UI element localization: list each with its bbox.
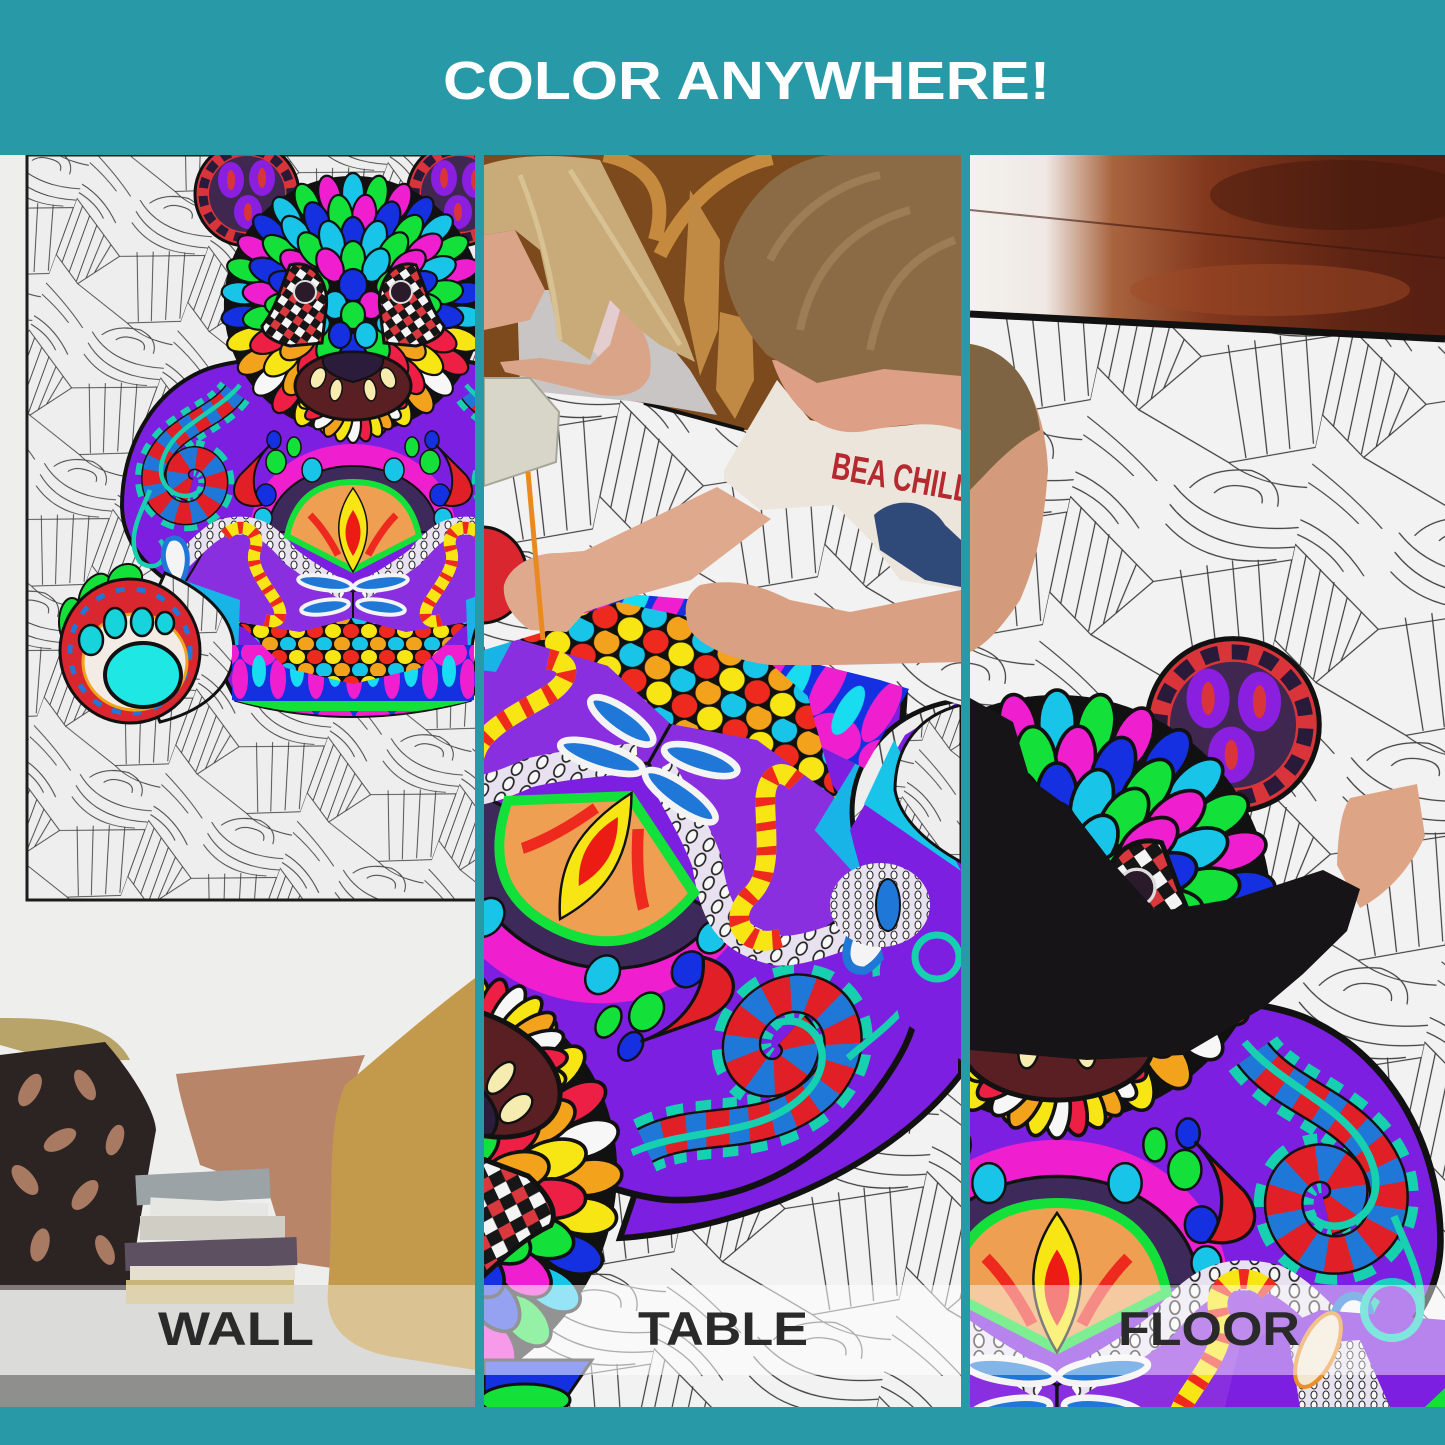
head base <box>225 177 481 433</box>
storage box <box>484 378 559 486</box>
cyan triangle <box>864 740 961 871</box>
boy hair <box>724 155 961 383</box>
arm <box>500 310 651 396</box>
serpent red stripes <box>153 392 235 513</box>
dress <box>517 290 717 415</box>
pencil <box>528 472 543 640</box>
bottom drops band <box>232 645 474 716</box>
blanket <box>0 1018 130 1062</box>
panel: table <box>0 155 1174 1445</box>
wood seam <box>970 210 1445 258</box>
panda on floor <box>569 639 1445 1445</box>
hair <box>970 344 1040 490</box>
lower teal mandala <box>1364 1282 1420 1338</box>
label band: floor <box>970 1285 1445 1375</box>
fur ring 2 <box>241 193 465 417</box>
blue paisley <box>876 879 900 931</box>
paw ring <box>70 589 190 713</box>
poster on wall <box>27 155 487 900</box>
fur ring 3 <box>265 217 441 393</box>
chair backs <box>604 155 772 255</box>
panda on table <box>0 361 1174 1445</box>
panel: floor <box>569 155 1445 1445</box>
hand <box>1337 784 1425 908</box>
main pad <box>105 643 181 707</box>
paw <box>60 579 200 723</box>
dark leaf pillow <box>0 1042 156 1290</box>
small spiral <box>915 935 959 979</box>
left eye patch <box>262 264 327 346</box>
boy face <box>772 360 961 432</box>
whale <box>874 503 961 587</box>
label: wall: WALL <box>158 1302 314 1355</box>
flame <box>339 488 367 572</box>
label band: table <box>484 1285 961 1375</box>
right eye patch <box>379 264 444 346</box>
hair highlights <box>520 170 680 345</box>
bottom banner <box>0 1407 1445 1445</box>
teeth <box>307 365 399 402</box>
rainbow scales <box>238 618 468 684</box>
book stack <box>125 1168 297 1304</box>
dome <box>287 482 419 570</box>
nose bridge scales <box>323 269 383 348</box>
paw lattice <box>83 614 187 710</box>
dark scallop ring <box>268 466 438 532</box>
left side details <box>59 385 353 723</box>
magenta mandala <box>250 444 456 532</box>
fur ring 4 <box>289 241 417 369</box>
flame core <box>346 510 360 556</box>
table edge <box>644 403 744 430</box>
teardrops <box>254 431 322 528</box>
purple body extension <box>620 900 961 1238</box>
shirt print <box>828 446 974 587</box>
yellow swirl <box>225 528 280 621</box>
boy t-shirt <box>724 380 961 590</box>
wood red patch <box>1130 264 1410 316</box>
white paisley fringe <box>830 863 930 947</box>
boy left arm <box>504 487 771 632</box>
corner green <box>1425 1388 1445 1407</box>
white arm <box>895 705 961 862</box>
lower paisley <box>1286 1307 1350 1393</box>
panda head <box>221 173 485 443</box>
person head <box>970 344 1048 652</box>
arm <box>130 573 234 722</box>
yellow swirl stripes <box>225 528 280 621</box>
lower white fringe <box>1290 1340 1390 1407</box>
side flames <box>310 515 396 555</box>
blue leaves <box>297 572 353 617</box>
claws <box>58 563 144 636</box>
pink pillow <box>176 1055 365 1268</box>
boy right arm <box>686 582 961 665</box>
blue paisley <box>163 538 187 585</box>
title: COLOR ANYWHERE! <box>443 51 1050 111</box>
bean bag <box>328 978 475 1370</box>
serpent teal line <box>134 385 240 566</box>
muzzle <box>295 352 411 420</box>
serpent blue stripes <box>153 392 235 513</box>
hair <box>484 156 695 362</box>
poster edge <box>970 314 1445 339</box>
wood floor <box>970 155 1445 337</box>
girl <box>484 156 717 415</box>
label: table: TABLE <box>638 1302 808 1355</box>
panda left ear <box>195 142 299 246</box>
dining room background <box>484 155 961 440</box>
red petal <box>234 445 270 506</box>
body <box>122 357 584 716</box>
face <box>970 344 1048 652</box>
panel: wall <box>0 155 475 1407</box>
white paisley band <box>180 518 353 641</box>
panda artwork <box>59 142 647 723</box>
bottom scallops <box>480 1360 592 1416</box>
label: floor: FLOOR <box>1118 1302 1300 1355</box>
fur ring 1 <box>221 173 485 437</box>
black sleeve <box>970 698 1360 1060</box>
wood dark patch <box>1210 160 1445 230</box>
nose <box>323 352 383 382</box>
lower right purple patch <box>1225 1310 1445 1407</box>
floor <box>0 1285 475 1407</box>
shirt lettering: BEA CHILL <box>828 446 974 511</box>
label band: wall <box>0 1285 475 1375</box>
top banner <box>0 0 1445 155</box>
toes <box>79 608 174 655</box>
serpent body <box>153 392 235 513</box>
paw at table edge <box>437 527 527 623</box>
purple patch by arm <box>850 700 961 1060</box>
serpent fringe <box>153 392 235 513</box>
arm gap cyan <box>168 575 240 655</box>
muzzle feather ring <box>295 380 411 443</box>
white fringe <box>170 526 345 592</box>
mirrored side details <box>353 385 647 723</box>
mirrored ear <box>407 142 511 246</box>
face <box>484 230 545 330</box>
hair highlights <box>770 175 955 350</box>
table poster above panda <box>484 400 961 705</box>
pink top <box>570 255 655 358</box>
